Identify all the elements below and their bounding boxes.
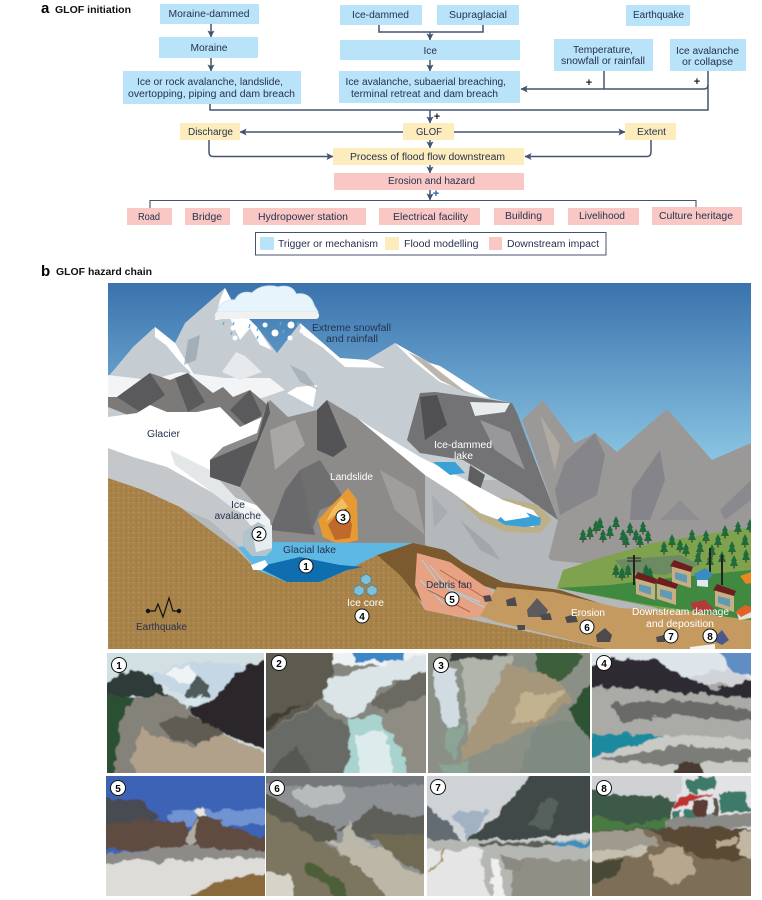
box: Building: Building: [505, 211, 542, 222]
box: Earthquake: [626, 5, 690, 26]
box: Process of flood flow downstream: Process of flood flow downstream: [350, 152, 505, 163]
marker 2: [272, 656, 286, 670]
box: Road: Road: [138, 212, 160, 223]
box: Ice or rock avalanche: overtopping, piping and dam breach: [128, 89, 295, 100]
box: Erosion and hazard: Erosion and hazard: [388, 176, 475, 187]
box: Culture heritage: Culture heritage: [659, 211, 733, 222]
marker 4: [596, 656, 612, 670]
box: Hydropower station: [243, 208, 366, 225]
box: GLOF: [403, 123, 454, 140]
box: Temperature, snowfall or rainfall: [554, 39, 653, 71]
legend: Flood modelling: [404, 239, 478, 250]
marker 2: 2: [276, 659, 282, 670]
heading: panel b: b: [41, 263, 50, 280]
scene number markers: [252, 510, 717, 643]
marker 5: [110, 780, 126, 796]
scene number markers: 2: [256, 530, 262, 541]
ice-dammed glacier tongue and lake: [357, 418, 552, 533]
scene labels: Debris fan: [426, 580, 472, 591]
box: Culture heritage: [652, 207, 742, 225]
photo 2: ice avalanche into lake: [266, 653, 426, 773]
photo 5: debris fan: [106, 776, 265, 896]
box: Ice or rock avalanche: [123, 71, 301, 104]
marker 5: 5: [115, 784, 121, 795]
photo 7: downstream damage: [427, 776, 590, 896]
box: Road: [127, 208, 172, 225]
marker 6: 6: [274, 784, 280, 795]
landslide icon area: [318, 488, 358, 545]
village houses: [634, 560, 751, 649]
legend: Trigger or mechanism: [278, 239, 378, 250]
box: Extent: Extent: [637, 127, 666, 138]
scene number markers: 3: [340, 513, 346, 524]
heading: panel a: GLOF initiation: [55, 4, 131, 16]
upper-right dark mountain: [407, 392, 558, 520]
box: Ice-dammed: [340, 5, 422, 25]
box: Moraine-dammed: [160, 4, 259, 24]
heading: panel b: GLOF hazard chain: [56, 266, 152, 278]
dark mid ridge: [108, 373, 270, 427]
panel b: hazard chain illustration: [108, 283, 754, 649]
erosion zone: [480, 587, 751, 649]
scene number markers: 7: [668, 632, 674, 643]
box: Ice-dammed: Ice-dammed: [352, 10, 409, 21]
panel a: GLOF initiation flowchart: [41, 0, 746, 255]
brown bank: [377, 543, 600, 604]
box: Ice avalanche, subaerial breaching: [339, 71, 520, 103]
marker 7: 7: [435, 783, 441, 794]
box: Ice avalanche or collapse: Ice avalanche: [676, 46, 739, 57]
connector arrows: [150, 23, 708, 208]
scene labels: Erosion: [571, 608, 605, 619]
right mountains: [522, 400, 751, 565]
box: Ice avalanche or collapse: [670, 39, 746, 71]
scene number markers: 8: [707, 632, 713, 643]
box: Ice avalanche or collapse: or collapse: [682, 57, 733, 68]
glacier: [108, 405, 272, 547]
box: Supraglacial: [437, 5, 519, 25]
scene labels: Downstream damage: [632, 607, 729, 618]
central grey mountain: [210, 400, 430, 550]
scene labels: Ice: [231, 500, 245, 511]
scene labels: [136, 323, 729, 633]
photo 1: moraine-dammed lake: [107, 653, 264, 773]
box: Hydropower station: Hydropower station: [258, 212, 348, 223]
box: Temperature, snowfall or rainfall: Temperature,: [573, 45, 633, 56]
scene number markers: 4: [359, 612, 365, 623]
marker 1: 1: [116, 661, 122, 672]
scene labels: and deposition: [646, 619, 714, 630]
scene number markers: 6: [584, 623, 590, 634]
box: Earthquake: Earthquake: [633, 10, 684, 21]
legend: Downstream impact: [507, 239, 599, 250]
marker 6: [270, 780, 284, 796]
ground: [108, 478, 607, 649]
legend: [256, 232, 606, 255]
green valley: [557, 528, 751, 620]
marker 3: [434, 658, 448, 672]
box: Moraine: [159, 37, 258, 58]
marker 3: 3: [438, 661, 444, 672]
debris fan: [415, 553, 493, 618]
scene labels: avalanche: [214, 511, 261, 522]
scene labels: and rainfall: [326, 334, 378, 345]
glacial lake: [238, 542, 413, 582]
box: Ice avalanche, subaerial breaching: Ice avalanche, subaerial breaching,: [346, 77, 506, 88]
scene labels: Extreme snowfall: [312, 323, 391, 334]
photo 4: ice core moraine and lake: [592, 653, 751, 773]
plus signs: +: [433, 188, 439, 200]
box: Electrical facility: Electrical facility: [393, 212, 468, 223]
plus signs: [433, 76, 700, 200]
photo 6: erosion valley: [266, 776, 424, 896]
marker 8: [596, 780, 612, 796]
box: Erosion and hazard: [334, 173, 524, 190]
plus signs: +: [694, 76, 700, 88]
heading: panel a: [41, 0, 131, 17]
box: Supraglacial: Supraglacial: [449, 10, 507, 21]
box: Livelihood: [568, 208, 639, 225]
box: Discharge: Discharge: [188, 127, 233, 138]
photo 3: landslide: [428, 653, 590, 773]
box: Ice: [340, 40, 520, 60]
scene labels: Glacial lake: [283, 545, 336, 556]
heading: panel b: [41, 263, 152, 280]
marker 8: 8: [601, 784, 607, 795]
box: Bridge: [185, 208, 230, 225]
scene number markers: 1: [303, 562, 309, 573]
scene labels: Landslide: [330, 472, 373, 483]
box: Ice or rock avalanche: Ice or rock avalanche, landslide,: [137, 77, 283, 88]
box: Ice: Ice: [424, 46, 437, 57]
scene number markers: 5: [449, 595, 455, 606]
box: Moraine-dammed: Moraine-dammed: [168, 9, 250, 20]
scene labels: Ice core: [347, 598, 384, 609]
earthquake icon: [146, 598, 181, 617]
box: GLOF: GLOF: [416, 127, 442, 138]
moraine valley: [425, 475, 552, 560]
snowy back mountains: [108, 288, 512, 480]
photo 8: damaged building: [582, 764, 761, 900]
box: Moraine: Moraine: [190, 43, 228, 54]
marker 1: [112, 658, 126, 672]
scene labels: Ice-dammed: [434, 440, 492, 451]
scene labels: Glacier: [147, 429, 181, 440]
marker 4: 4: [601, 659, 607, 670]
box: Livelihood: Livelihood: [579, 211, 625, 222]
box: Electrical facility: [379, 208, 480, 225]
ice avalanche: [243, 522, 272, 556]
plus signs: +: [586, 77, 592, 89]
box: Process of flood flow downstream: [333, 148, 524, 165]
storm cloud with snow and rain: [215, 286, 319, 340]
box: Extent: [625, 123, 676, 140]
power poles: [627, 548, 722, 585]
box: Ice avalanche, subaerial breaching: terminal retreat and dam breach: [351, 89, 498, 100]
scene labels: lake: [454, 451, 473, 462]
box: Temperature, snowfall or rainfall: snowfall or rainfall: [561, 56, 645, 67]
marker 7: [430, 780, 446, 794]
ice core icon: [354, 574, 377, 596]
box: Building: [494, 208, 554, 225]
plus signs: +: [434, 111, 440, 123]
box: Discharge: [180, 123, 240, 140]
scene labels: Earthquake: [136, 622, 187, 633]
box: Bridge: Bridge: [192, 212, 222, 223]
impact boxes row: [127, 207, 742, 225]
forest: [579, 516, 754, 580]
heading: panel a: a: [41, 0, 50, 17]
